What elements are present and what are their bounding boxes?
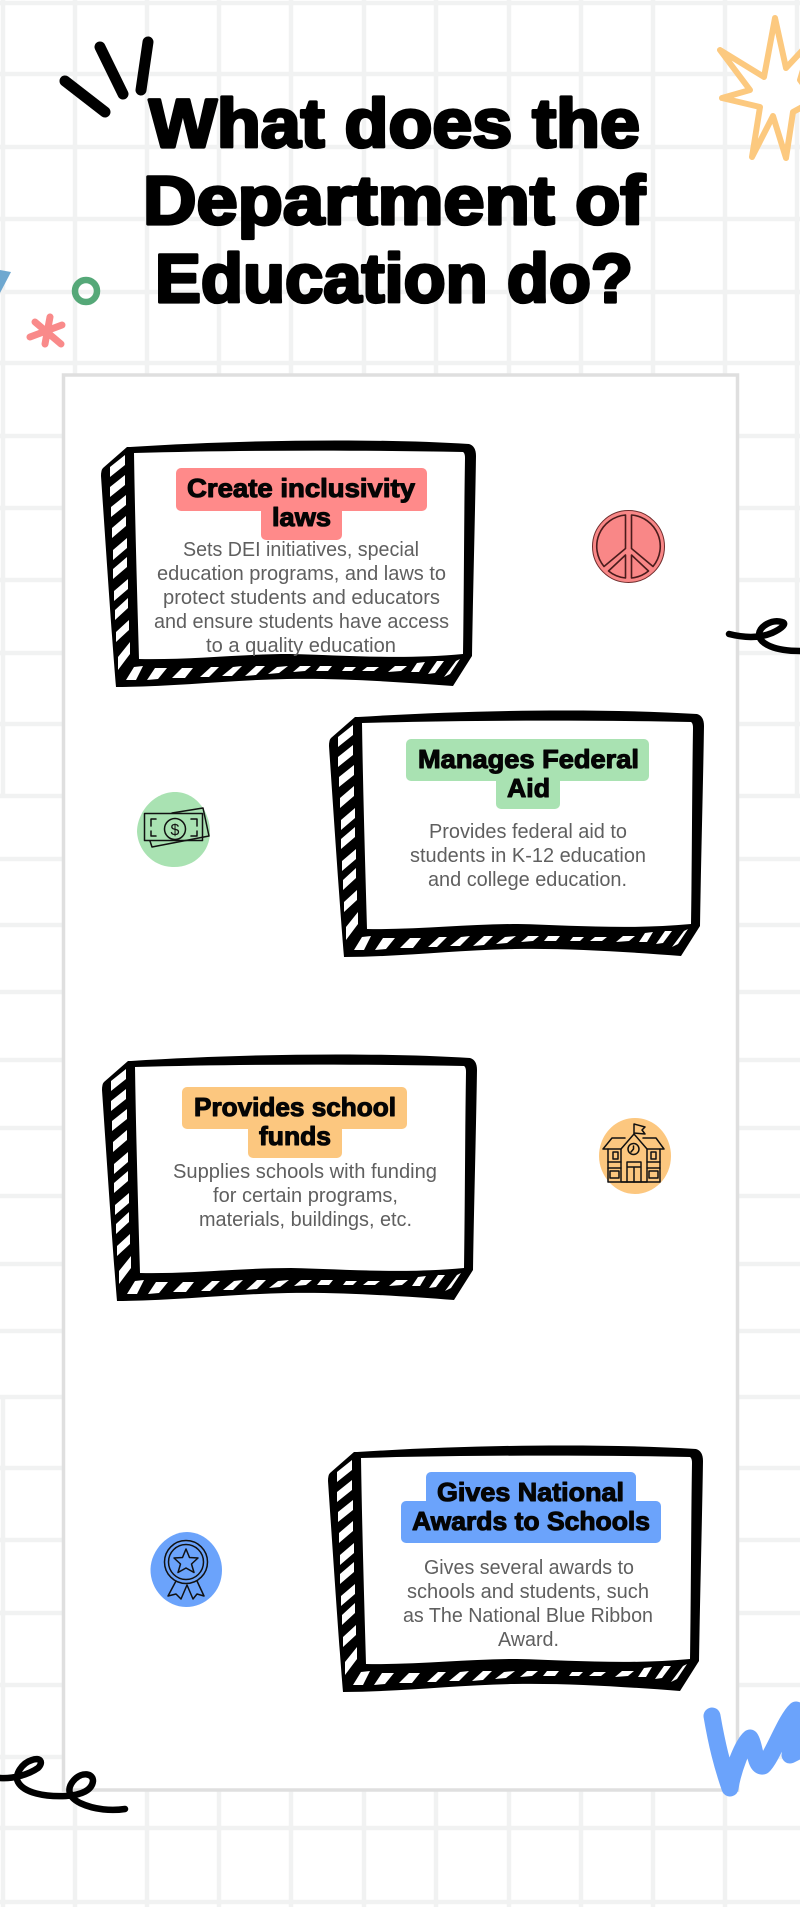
body text: education programs, and laws to [157,563,446,585]
decoration: orange star [720,18,800,158]
decoration: right squiggle [729,621,800,651]
card: Provides school funds [102,1054,477,1301]
heading: funds [259,1121,331,1151]
body text: to a quality education [206,635,396,657]
heading pill [401,1472,661,1543]
decoration: blue scribble [712,1710,800,1788]
icon: money: $ [171,822,180,839]
heading [412,1477,650,1536]
decoration: bottom-left squiggle [0,1759,125,1810]
body text: and college education. [428,869,627,891]
heading [187,473,416,532]
heading: laws [272,502,331,532]
card: Gives National Awards to Schools [328,1445,703,1692]
icon: money [137,792,210,867]
icon: school building [599,1118,671,1194]
body text: materials, buildings, etc. [199,1209,412,1231]
body text: Provides federal aid to [429,821,627,843]
heading: Aid [507,773,550,803]
body text: schools and students, such [407,1581,649,1603]
body text: Award. [498,1629,559,1651]
body text [173,1161,437,1231]
body text [410,821,646,891]
decoration: blue shape at left edge [0,270,11,293]
body text: Gives several awards to [424,1557,634,1579]
body text: Sets DEI initiatives, special [183,539,419,561]
title: Department of [143,162,646,239]
icon: peace sign [592,510,664,582]
decoration: black burst lines [65,42,148,112]
icon: award ribbon [150,1532,222,1607]
body text: students in K-12 education [410,845,646,867]
title: Education do? [155,240,633,317]
title: What does the [149,85,640,162]
heading pill [406,739,649,809]
body text: and ensure students have access [154,611,449,633]
title [143,85,646,317]
body text [154,539,449,657]
heading: Create inclusivity [187,473,416,503]
heading: Manages Federal [418,744,639,774]
card: Manages Federal Aid [329,710,704,957]
heading: Provides school [194,1092,396,1122]
card: Create inclusivity laws [101,440,476,687]
decoration: red asterisk [30,317,62,344]
body text: protect students and educators [163,587,440,609]
heading pill [176,468,427,540]
panel: main content [64,375,738,1790]
body text: for certain programs, [213,1185,398,1207]
heading [418,744,639,803]
heading: Gives National [437,1477,624,1507]
body text: as The National Blue Ribbon [403,1605,653,1627]
body text [403,1557,653,1651]
decoration: green ring [75,280,97,302]
body text: Supplies schools with funding [173,1161,437,1183]
heading pill [182,1087,407,1158]
heading [194,1092,396,1151]
heading: Awards to Schools [412,1506,650,1536]
